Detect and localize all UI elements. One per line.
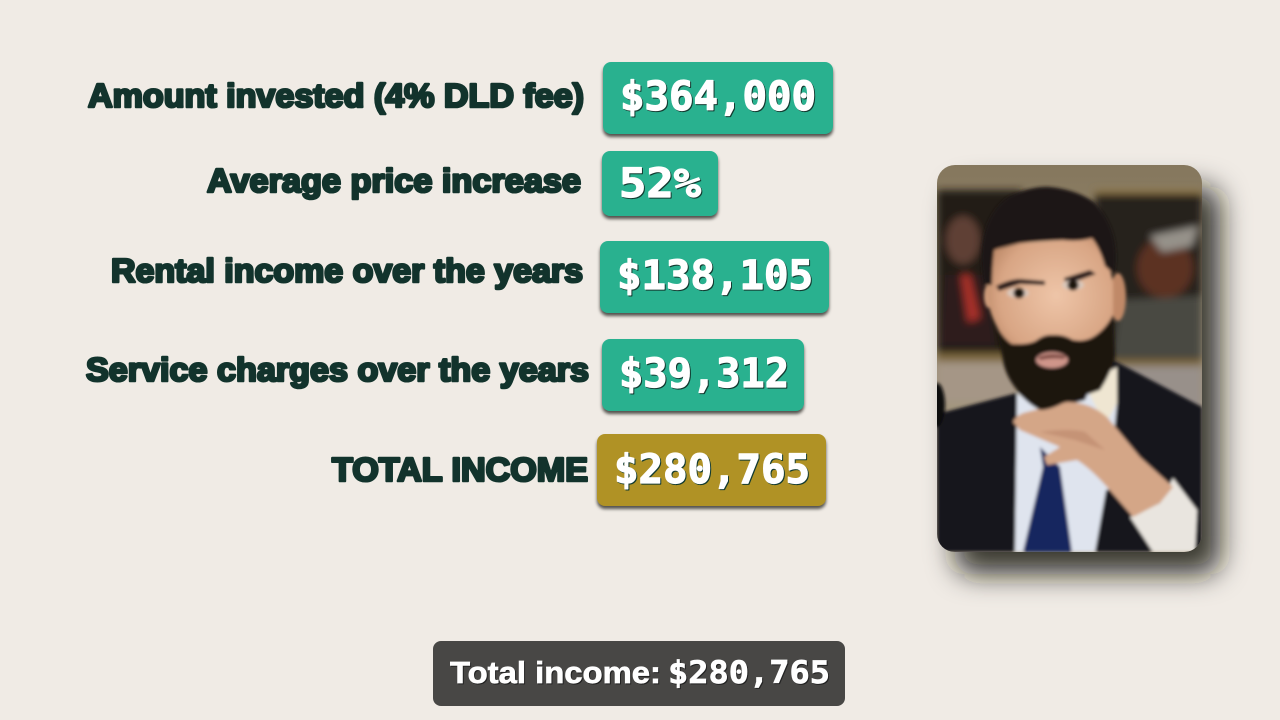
beard xyxy=(997,315,1115,410)
label: total income: TOTAL INCOME xyxy=(332,451,588,488)
label: rental income: Rental income over the years xyxy=(111,252,583,289)
caption text: Total income: xyxy=(450,655,661,690)
microphone xyxy=(937,381,948,428)
suit xyxy=(937,360,1202,552)
value pill: 52% xyxy=(602,151,718,216)
hair xyxy=(982,187,1116,285)
portrait: presenter in suit xyxy=(929,165,1202,552)
value pill: $280,765 xyxy=(597,434,826,506)
right ear xyxy=(1110,273,1126,321)
tie xyxy=(1023,447,1072,552)
value pill: $364,000: $364,000 xyxy=(620,74,816,120)
left ear xyxy=(984,284,994,308)
value pill: $280,765: $280,765 xyxy=(614,447,810,493)
wall below paintings xyxy=(937,362,1202,411)
label: amount invested: Amount invested (4% DLD fee) xyxy=(88,77,584,114)
portrait shadow xyxy=(955,187,1220,574)
label: average price increase: Average price increase xyxy=(207,162,581,199)
value pill: 52%: 52% xyxy=(619,161,701,207)
neck xyxy=(1062,391,1088,405)
jacket lapel xyxy=(1093,488,1112,552)
mouth xyxy=(1036,352,1068,368)
value pill: $364,000 xyxy=(603,62,833,134)
shirt xyxy=(1015,367,1117,552)
row: service charges xyxy=(86,339,804,411)
eyes xyxy=(1007,288,1029,298)
eyebrows xyxy=(996,270,1096,291)
row: amount invested xyxy=(88,62,833,134)
value pill: $39,312 xyxy=(602,339,804,411)
row: average price increase xyxy=(207,151,718,216)
label: service charges: Service charges over the years xyxy=(86,351,589,388)
caption value: $280,765 xyxy=(668,655,830,691)
value pill: $39,312: $39,312 xyxy=(619,351,789,397)
shirt cuff xyxy=(1130,478,1197,552)
caption bar xyxy=(433,641,845,706)
hand xyxy=(1013,402,1173,517)
row: rental income xyxy=(111,241,829,313)
right painting xyxy=(1095,190,1202,366)
face xyxy=(988,235,1115,348)
value pill: $138,105 xyxy=(600,241,829,313)
left painting xyxy=(937,190,1022,362)
row: total income xyxy=(332,434,826,506)
value pill: $138,105: $138,105 xyxy=(617,253,813,299)
